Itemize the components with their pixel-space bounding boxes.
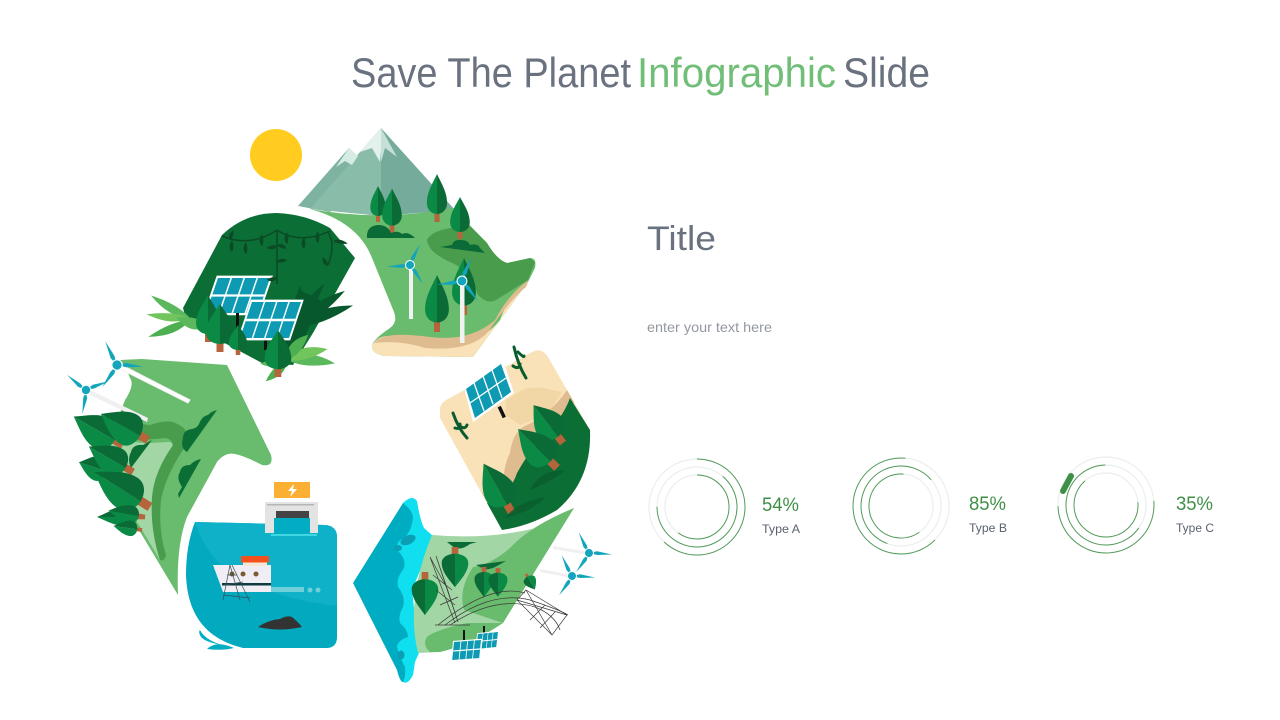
- chart: Type A rings: [641, 451, 753, 563]
- stat: 54% Type A: 54%: [762, 495, 799, 516]
- dune: [505, 388, 562, 425]
- panel: wind and forest arrow: [54, 330, 272, 595]
- bushes: [367, 225, 485, 253]
- wind turbines: [540, 523, 614, 598]
- splash: [199, 630, 234, 650]
- green land: [310, 208, 535, 357]
- chart: Type C rings: [1050, 449, 1162, 561]
- arrow shape: [100, 359, 272, 595]
- pylons and wires: [430, 556, 568, 635]
- tan band: [480, 390, 574, 507]
- title: Slide: [843, 49, 930, 96]
- stat: 54% Type A: Type A: [762, 522, 800, 536]
- light path: [105, 440, 173, 560]
- title: Infographic: [637, 49, 836, 96]
- trees: [370, 174, 476, 332]
- title: [351, 49, 930, 96]
- stat: 85% Type B: 85%: [969, 494, 1006, 515]
- left fronds: [146, 293, 209, 342]
- panel: coast and power line arrow: [353, 498, 614, 683]
- solar panels: [451, 626, 499, 661]
- wind turbines: [54, 330, 190, 422]
- dam: [265, 502, 318, 536]
- trees: [470, 396, 575, 521]
- darker hill: [427, 226, 535, 302]
- icon: sun: [250, 129, 302, 181]
- heading: Title: Title: [647, 220, 716, 258]
- stat: 35% Type C: 35%: [1176, 494, 1213, 515]
- solar panel: [464, 360, 514, 422]
- dark palm: [274, 281, 354, 360]
- panel: desert arrow: [440, 347, 590, 530]
- whale: [258, 616, 302, 630]
- vine: [222, 229, 348, 284]
- cyan shore: [380, 498, 434, 683]
- stat: 35% Type C: [1176, 494, 1214, 535]
- light land: [414, 508, 574, 653]
- shrubs: [505, 470, 565, 518]
- bushes: [129, 410, 217, 498]
- boat: [213, 556, 320, 602]
- hanging trees: [412, 542, 540, 615]
- mid green land: [462, 508, 574, 623]
- sand shoreline: [372, 282, 528, 357]
- solar panels: [203, 276, 304, 350]
- panel: mountain and wind farm arrow: [298, 128, 535, 357]
- front tree: [265, 330, 291, 377]
- panel: water and hydro power arrow: [186, 482, 337, 650]
- right fronds: [260, 330, 335, 385]
- wind turbines: [386, 236, 492, 343]
- chart: Type B rings: [833, 438, 969, 574]
- panel: forest and solar arrow: [146, 213, 355, 385]
- forest trees: [196, 295, 247, 355]
- text block: description: enter your text here: [647, 319, 772, 335]
- stat: 54% Type A: [762, 495, 800, 536]
- sand base: [440, 350, 590, 530]
- stat: 35% Type C: Type C: [1176, 521, 1214, 535]
- teal sea: [353, 503, 413, 682]
- water body: [186, 522, 337, 648]
- stat: 85% Type B: Type B: [969, 521, 1007, 535]
- cacti: [453, 347, 526, 438]
- forest edge: [487, 398, 590, 530]
- dark road: [120, 413, 187, 560]
- darker water blobs: [394, 533, 417, 660]
- mountain: [298, 128, 455, 216]
- battery icon: [274, 482, 310, 498]
- trees: [65, 399, 160, 538]
- stat: 85% Type B: [969, 494, 1007, 535]
- forest hill: [183, 213, 355, 365]
- title: Save The Planet: [351, 49, 631, 96]
